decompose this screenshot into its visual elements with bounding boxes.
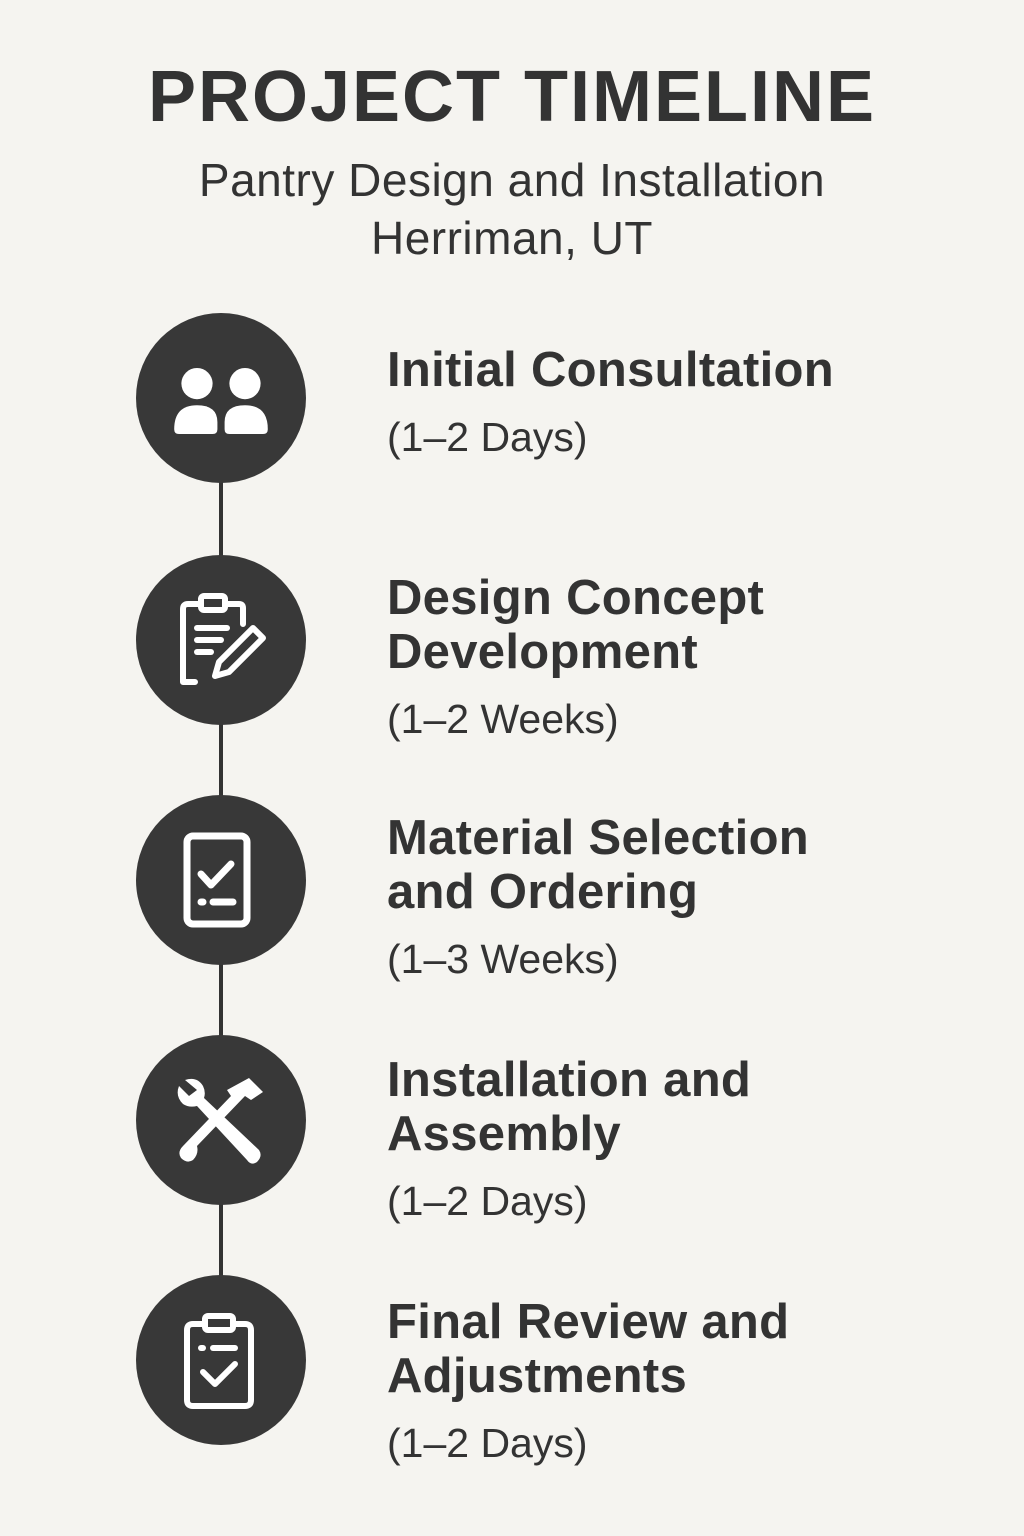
step 4 text: Assembly [387, 1107, 621, 1161]
subtitle line 2: Herriman, UT [371, 212, 653, 264]
step 1 text: (1–2 Days) [387, 414, 588, 460]
step 1 text: Initial Consultation [387, 343, 834, 397]
step 4 text: Installation and [387, 1053, 751, 1107]
step 3 text: and Ordering [387, 865, 698, 919]
icon: wrench and screwdriver [136, 1035, 306, 1205]
icon: checklist tablet [136, 795, 306, 965]
step 2 text: Development [387, 625, 698, 679]
step 3 text: Material Selection [387, 811, 809, 865]
timeline connector [219, 400, 223, 1360]
subtitle line 1: Pantry Design and Installation [199, 154, 825, 206]
step 5 text: Final Review and [387, 1295, 789, 1349]
step 2 text: Design Concept [387, 571, 764, 625]
step 2 text [387, 571, 764, 742]
step 2 text: (1–2 Weeks) [387, 696, 619, 742]
step 3 text [387, 811, 809, 982]
step 4 text: (1–2 Days) [387, 1178, 588, 1224]
icon: clipboard with pencil [136, 555, 306, 725]
step 5 text [387, 1295, 789, 1466]
step 3 text: (1–3 Weeks) [387, 936, 619, 982]
icon: people [136, 313, 306, 483]
step 5 text: (1–2 Days) [387, 1420, 588, 1466]
step 4 text [387, 1053, 751, 1224]
icon: clipboard check [136, 1275, 306, 1445]
title: PROJECT TIMELINE [148, 57, 876, 137]
step 5 text: Adjustments [387, 1349, 687, 1403]
step 1 text [387, 343, 834, 460]
